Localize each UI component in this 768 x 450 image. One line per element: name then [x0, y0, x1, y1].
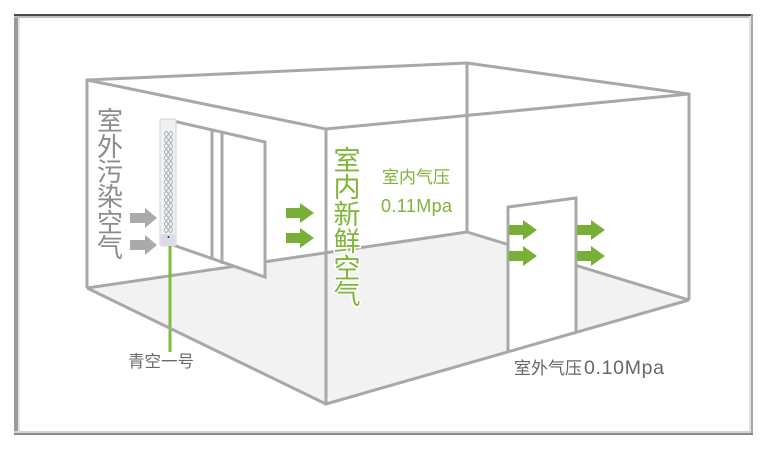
heading: indoor fresh air: 鲜 — [334, 227, 360, 257]
label: outdoor pressure: 0.10Mpa — [584, 357, 664, 379]
heading: outdoor polluted air: 外 — [97, 132, 123, 162]
heading: indoor fresh air — [334, 146, 360, 310]
label: indoor pressure: 0.11Mpa — [381, 196, 453, 216]
room: front floor edges — [87, 288, 689, 404]
green leader line — [168, 246, 172, 352]
heading: outdoor polluted air: 染 — [97, 182, 123, 212]
arrows: green through window — [286, 203, 314, 248]
door — [508, 198, 576, 352]
room: floor — [87, 232, 689, 404]
label: indoor pressure: 室内气压 — [382, 168, 450, 187]
heading: indoor fresh air: 内 — [334, 173, 360, 203]
heading: outdoor polluted air: 室 — [97, 106, 123, 136]
heading: indoor fresh air: 气 — [334, 280, 360, 310]
label: indoor pressure — [381, 168, 453, 216]
room: wall outlines — [87, 63, 689, 404]
label: outdoor pressure — [514, 357, 664, 379]
label: device name: 青空一号 — [128, 352, 194, 371]
arrows: incoming grey air — [130, 208, 157, 255]
opened window panel — [173, 121, 265, 277]
heading: indoor fresh air: 空 — [334, 254, 360, 284]
heading: outdoor polluted air: 气 — [97, 233, 123, 263]
heading: outdoor polluted air: 空 — [97, 208, 123, 238]
label: outdoor pressure: 室外气压 — [514, 359, 582, 378]
heading: indoor fresh air: 新 — [334, 200, 360, 230]
heading: outdoor polluted air: 污 — [97, 157, 123, 187]
device: purifier unit — [160, 119, 176, 246]
heading: indoor fresh air: 室 — [334, 146, 360, 176]
heading: outdoor polluted air — [97, 106, 123, 263]
arrows: green through door — [509, 220, 605, 266]
